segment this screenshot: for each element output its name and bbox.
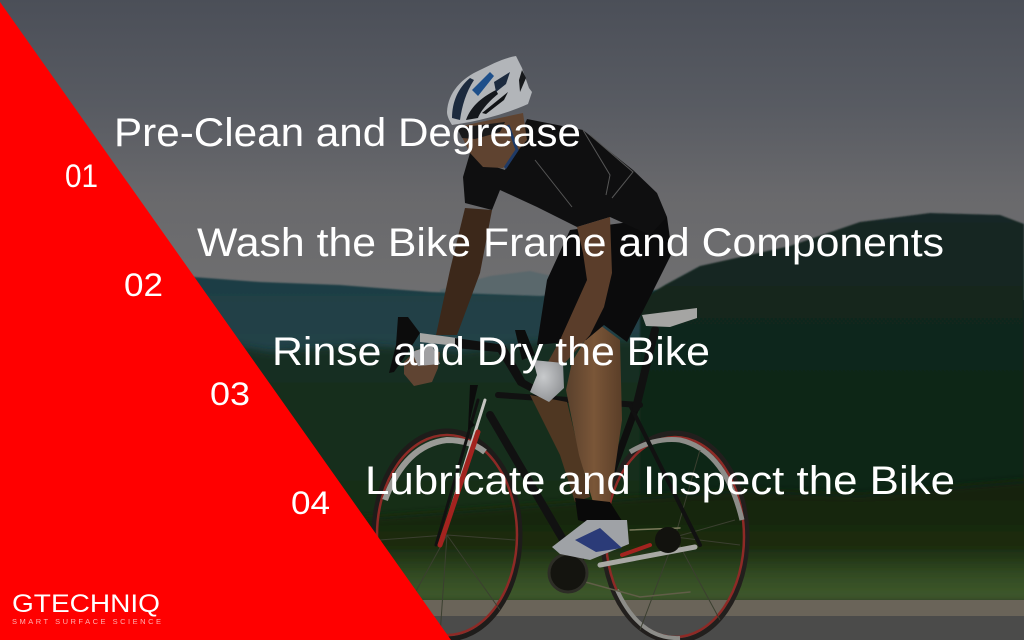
background: blue-green hills	[180, 276, 660, 400]
background: right ridge	[640, 213, 1024, 560]
left glove and hand	[404, 345, 440, 386]
logo: Gtechniq	[12, 590, 161, 626]
step 4 number: 04	[291, 485, 330, 521]
crankset	[549, 554, 587, 592]
step 3 number: 03	[210, 376, 250, 412]
rear cassette	[655, 527, 681, 553]
sunglasses	[457, 122, 505, 139]
handlebar	[389, 317, 560, 430]
right arm	[548, 217, 612, 365]
right glove	[530, 360, 564, 402]
front wheel	[374, 431, 520, 639]
step 4 heading: Lubricate and Inspect the Bike	[365, 459, 955, 503]
background: distant hill	[440, 271, 620, 300]
jersey	[463, 119, 667, 235]
rear wheel	[603, 433, 747, 640]
background: left forest	[230, 340, 660, 610]
front leg	[566, 322, 622, 503]
saddle	[642, 308, 697, 327]
step 2 number: 02	[124, 267, 163, 303]
background: sky	[0, 0, 1024, 300]
socks	[575, 498, 624, 524]
step 3 heading: Rinse and Dry the Bike	[272, 330, 710, 374]
shoe	[552, 520, 629, 560]
step 2 heading: Wash the Bike Frame and Components	[197, 221, 944, 265]
background: asphalt	[380, 616, 1024, 640]
shorts	[537, 217, 672, 345]
rear leg	[530, 395, 590, 502]
background: gravel	[380, 600, 1024, 616]
cyclist and bicycle	[374, 56, 747, 640]
face	[457, 113, 527, 168]
chin strap	[505, 125, 517, 168]
helmet	[447, 56, 532, 125]
step 1 heading: Pre-Clean and Degrease	[114, 111, 581, 155]
left arm	[436, 208, 492, 335]
logo: Gtechniq: GTECHNIQ	[12, 590, 160, 618]
bike frame	[436, 330, 700, 597]
red triangle panel	[0, 2, 451, 640]
logo: Gtechniq: SMART SURFACE SCIENCE	[12, 617, 161, 626]
jersey seams	[535, 130, 633, 207]
background: roadside bushes and grass	[340, 480, 1024, 602]
step 1 number: 01	[65, 158, 98, 194]
